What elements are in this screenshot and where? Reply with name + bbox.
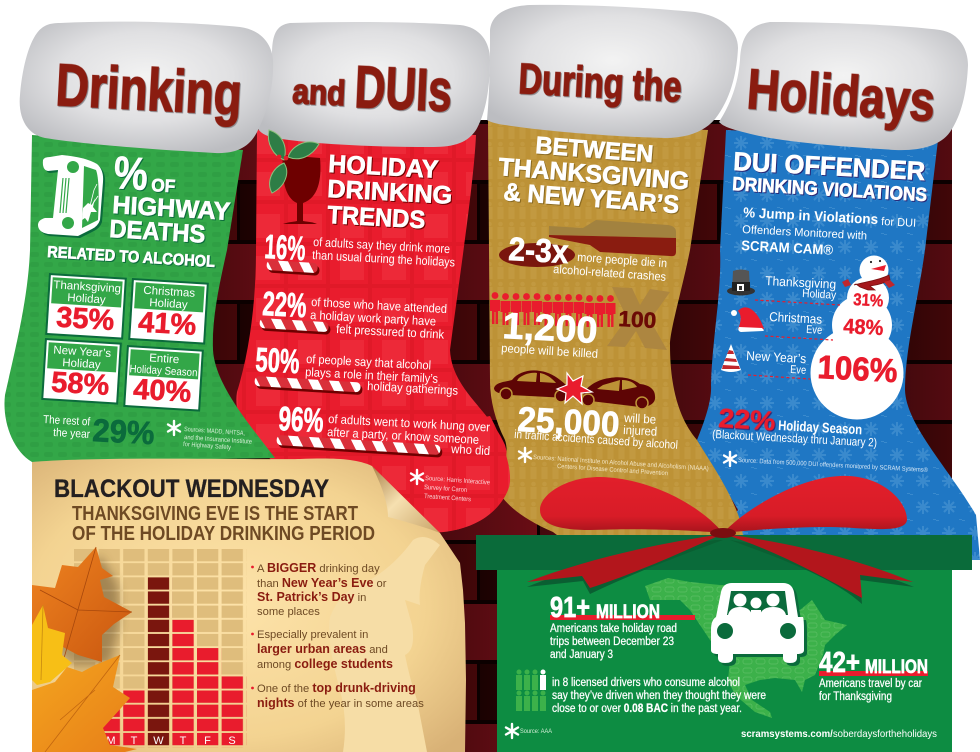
stat: 50%: of people say that alcohol [306, 352, 431, 373]
text: travel by car: Americans travel by car [819, 678, 922, 690]
stat: 22% holiday season: Holiday Season [778, 417, 863, 437]
stat heading: % of highway deaths: OF [151, 175, 176, 196]
source note: Sources: National Institute on Alcohol Abuse and Alcoholism (NIAAA) [533, 454, 709, 473]
panel: gift box body [497, 570, 952, 752]
stat box: Christmas 41%: Holiday [149, 297, 188, 311]
title: and DUIs: DUIs [353, 54, 453, 124]
stat: 91+ million [550, 592, 695, 624]
label: christmas eve: Eve [806, 324, 822, 337]
paper curl [372, 466, 440, 533]
title: Holidays: Holidays [745, 57, 937, 134]
panel: green stocking [4, 135, 275, 462]
label: new year's eve: Eve [790, 364, 806, 377]
stat: 2-3x [499, 230, 668, 284]
bow right loop [723, 476, 907, 533]
panel: red stocking foot overlap [440, 416, 510, 530]
subheading: THANKSGIVING EVE IS THE START [72, 503, 358, 525]
illustration: snowman: 106% [817, 348, 898, 389]
stat: 91+ million: 91+ [550, 592, 590, 624]
title: and DUIs: and [292, 72, 346, 113]
ribbon bow [527, 476, 914, 604]
stat: 1,200: people will be killed [501, 341, 598, 361]
icon: row of people [490, 292, 616, 327]
silhouette: man drinking [329, 537, 440, 752]
stat: 16%: than usual during the holidays [312, 248, 455, 269]
stat: 96%: after a party, or know someone [327, 425, 479, 447]
stat box: Thanksgiving 35%: Holiday [67, 292, 106, 307]
source note: for Highway Safety [183, 441, 232, 451]
icon: bottle [549, 220, 676, 256]
stocking cuff 3 [487, 5, 738, 138]
stat: 2-3x: 2-3x [508, 230, 570, 270]
stat: 2-3x: more people die in [577, 250, 668, 270]
bow tail shadows [527, 540, 914, 604]
bow right tail [723, 534, 913, 598]
illustration: snowman: 31% [853, 290, 884, 311]
heading: DUI offender drinking violations: DUI OFFENDER [733, 146, 926, 186]
stat heading: % of highway deaths: HIGHWAY [112, 191, 231, 226]
heading: holiday drinking trends: HOLIDAY [328, 150, 439, 184]
stat box: New Year's 58%: New Year’s [53, 345, 112, 360]
stat box: New Year's 58%: Holiday [62, 357, 101, 371]
stat box: Entire season 40%: Entire [149, 352, 180, 366]
chart: calendar bars by day: M [106, 735, 116, 747]
heading: DUI offender drinking violations [732, 146, 928, 206]
stat box: New Year's 58% [41, 338, 122, 405]
text: bullet list: St. Patrick’s Day in [257, 590, 366, 604]
stat: rest of the year 29% [43, 412, 155, 451]
heading: blackout wednesday: BLACKOUT WEDNESDAY [54, 475, 329, 503]
source note: and the Insurance Institute [184, 434, 253, 446]
text: road trips: and January 3 [550, 649, 613, 661]
title: During the: During the [517, 55, 683, 112]
panel: parchment [32, 459, 466, 752]
icon: big X with 100: 100 [618, 306, 657, 333]
text: bullet list [251, 561, 424, 710]
stat: 25,000: injured [623, 423, 658, 439]
source note: Source: AAA [520, 728, 553, 735]
source note [424, 475, 491, 503]
heading: holiday drinking trends: TRENDS [327, 201, 426, 234]
stat: 50%: plays a role in their family’s [305, 365, 438, 386]
stat: 22%: of those who have attended [311, 295, 447, 316]
stat: 96% [276, 400, 491, 458]
stat: 22%: felt pressured to drink [336, 322, 445, 342]
stat: 16%: of adults say they drink more [313, 235, 450, 256]
chart: calendar bars by day: T [131, 735, 138, 747]
stat box: Christmas 41%: 41% [137, 306, 197, 342]
chart: calendar bars by day: S [228, 735, 236, 747]
panel: holiday drinking trends content [254, 130, 491, 503]
bow left tail [527, 534, 723, 588]
stat: 22%: 22% [262, 285, 308, 325]
stat: 50%: holiday gatherings [367, 379, 458, 398]
icon: source flake [506, 724, 518, 738]
stat: 22% [259, 285, 447, 342]
stat: rest of the year 29%: the year [53, 427, 91, 441]
stat: rest of the year 29%: 29% [92, 412, 155, 451]
panel: red stocking [236, 130, 509, 532]
label: christmas eve [769, 309, 823, 337]
panel: thanksgiving to new year content [490, 132, 709, 477]
icon: big X with 100 [607, 287, 670, 350]
label: new year's eve: New Year’s [746, 348, 807, 366]
stocking cuff 1 [20, 22, 273, 153]
icon: people grid [516, 670, 546, 711]
stat box: Entire season 40%: Holiday Season [129, 363, 198, 379]
icon: santa hat [731, 307, 764, 332]
url: scramsystems.com/soberdaysfortheholidays [741, 728, 937, 740]
heading: between thanksgiving and new year's: THANKSGIVING [498, 153, 690, 196]
stat: 50%: 50% [255, 341, 301, 381]
stat: 1,200: 1,200 [502, 305, 599, 351]
label: thanksgiving [765, 273, 837, 302]
stat: 22%: a holiday work party have [310, 308, 436, 329]
label: thanksgiving: Holiday [802, 288, 837, 302]
illustration: snowman: 48% [843, 315, 884, 340]
stat: 42+ million: 42+ [819, 647, 860, 679]
dashed leader lines [748, 300, 840, 379]
source note: Treatment Centers [424, 493, 472, 503]
text: bullet list: among college students [257, 657, 393, 671]
icon: source flake [168, 421, 180, 435]
stat box: Thanksgiving 35%: 35% [55, 302, 115, 337]
text: bullet list: One of the top drunk-driving [257, 681, 416, 695]
panel: gift box content [506, 583, 937, 740]
heading: between thanksgiving and new year's [498, 132, 690, 219]
title: and DUIs [292, 54, 453, 124]
stocking cuff 2 [258, 22, 490, 147]
source note: Survey for Caron [424, 484, 468, 494]
text: travel by car [819, 678, 922, 703]
panel: blue stocking [697, 130, 980, 560]
icon: source flake [519, 448, 531, 462]
heading: between thanksgiving and new year's: & NEW YEAR’S [503, 178, 680, 219]
icon: pilgrim hat [727, 270, 755, 296]
stat: 25,000: in traffic accidents caused by alcohol [514, 427, 678, 452]
stat: 91+ million: MILLION [596, 602, 660, 623]
parchment sheet [32, 459, 466, 752]
text: licensed drivers: in 8 licensed drivers who consume alcohol [552, 677, 740, 689]
bow left loop [540, 477, 723, 533]
text: road trips: Americans take holiday road [550, 623, 677, 635]
stat: 42+ million: MILLION [865, 657, 928, 678]
stat: 25,000: will be [623, 411, 657, 427]
source note: Sources: MADD, NHTSA, [184, 426, 245, 437]
stat box: Entire season 40%: 40% [132, 373, 192, 409]
heading: DUI offender drinking violations: DRINKING VIOLATIONS [732, 174, 928, 206]
panel: gold stocking [488, 120, 745, 545]
heading: holiday drinking trends: DRINKING [327, 175, 453, 210]
source note [183, 426, 253, 451]
bow knot [710, 528, 736, 538]
text: road trips: trips between December 23 [550, 636, 674, 648]
background: brick wall [200, 120, 952, 752]
intro text: Offenders Monitored with [742, 224, 867, 243]
text: bullet list: Especially prevalent in [257, 629, 368, 641]
stat: 16% [264, 228, 455, 276]
panel: highway deaths content [38, 146, 253, 451]
text: bullet list: larger urban areas and [257, 642, 388, 656]
stat box: Christmas 41% [128, 278, 209, 345]
stat heading: % of highway deaths: RELATED TO ALCOHOL [47, 244, 216, 271]
label: christmas eve: Christmas [769, 309, 823, 327]
chart: calendar bars by day: F [204, 735, 211, 747]
text: road trips [550, 623, 677, 661]
panel: DUI offender content [712, 146, 928, 474]
stat: 22% holiday season: 22% [718, 403, 776, 436]
icon: source flake [724, 452, 736, 466]
stat box: Thanksgiving 35% [45, 273, 127, 340]
icon: source flake [411, 470, 423, 484]
intro text: for DUI [881, 216, 916, 230]
intro text: SCRAM CAM® [741, 237, 834, 258]
stat: 22% holiday season [712, 403, 877, 450]
intro text: % Jump in Violations [743, 204, 879, 227]
gift box lid [476, 535, 972, 570]
icon: crashed car [38, 155, 105, 238]
text: licensed drivers: say they’ve driven when they thought they were [552, 690, 766, 702]
stat heading: % of highway deaths [47, 146, 231, 271]
illustration: autumn leaves [32, 547, 137, 752]
text: travel by car: for Thanksgiving [819, 691, 892, 703]
stat box: Thanksgiving 35%: Thanksgiving [53, 279, 121, 295]
chart: calendar bars by day: T [180, 735, 187, 747]
map: North America [645, 578, 847, 718]
stat: 96%: 96% [278, 400, 325, 440]
stat: 42+ million [819, 647, 928, 679]
icon: family car [711, 583, 807, 666]
chart: calendar bars by day: W [153, 735, 164, 747]
text: bullet list: nights of the year in some areas [257, 696, 424, 710]
text: bullet list: some places [257, 606, 320, 618]
source note: Centers for Disease Control and Prevention [557, 463, 668, 477]
text: bullet list: A BIGGER drinking day [257, 561, 380, 575]
label: new year's eve [746, 348, 807, 377]
stat: 25,000 [514, 400, 678, 452]
title: Drinking: Drinking [54, 52, 244, 128]
heading: between thanksgiving and new year's: BETWEEN [535, 132, 654, 168]
subheading: OF THE HOLIDAY DRINKING PERIOD [72, 523, 375, 545]
stat heading: % of highway deaths: % [112, 146, 149, 200]
source note: Source: Harris Interactive [425, 475, 491, 487]
intro text [741, 204, 916, 258]
stat box: Entire season 40% [123, 345, 204, 412]
icon: wine glass [283, 155, 320, 224]
stat: rest of the year 29%: The rest of [43, 414, 91, 428]
stocking cuff 4 [719, 22, 968, 150]
icon: holly [268, 130, 319, 193]
text: licensed drivers: close to or over 0.08 BAC in the past year. [552, 703, 742, 715]
stat: 16%: 16% [264, 228, 307, 268]
illustration: snowman [810, 256, 904, 420]
subheading [72, 503, 375, 545]
icon: party hat [721, 344, 741, 372]
source note: Source: Data from 500,000 DUI offenders monitored by SCRAM Systems® [738, 456, 928, 474]
stat heading: % of highway deaths: DEATHS [109, 215, 206, 249]
stat box: Christmas 41%: Christmas [143, 285, 196, 300]
text: bullet list: than New Year’s Eve or [257, 576, 387, 590]
icon: car crash [494, 370, 655, 409]
stat: 96%: of adults went to work hung over [328, 412, 490, 434]
text: licensed drivers [552, 677, 766, 715]
stat: 22% holiday season: (Blackout Wednesday thru January 2) [712, 427, 877, 450]
stat: 25,000: 25,000 [517, 400, 620, 444]
heading: holiday drinking trends [327, 150, 453, 234]
chart: calendar bars by day [74, 549, 246, 747]
stat: 96%: who did [450, 442, 491, 458]
stat box: New Year's 58%: 58% [50, 366, 110, 402]
stat: 50% [254, 341, 458, 398]
stat: 2-3x: alcohol-related crashes [553, 262, 666, 284]
label: thanksgiving: Thanksgiving [765, 273, 837, 292]
